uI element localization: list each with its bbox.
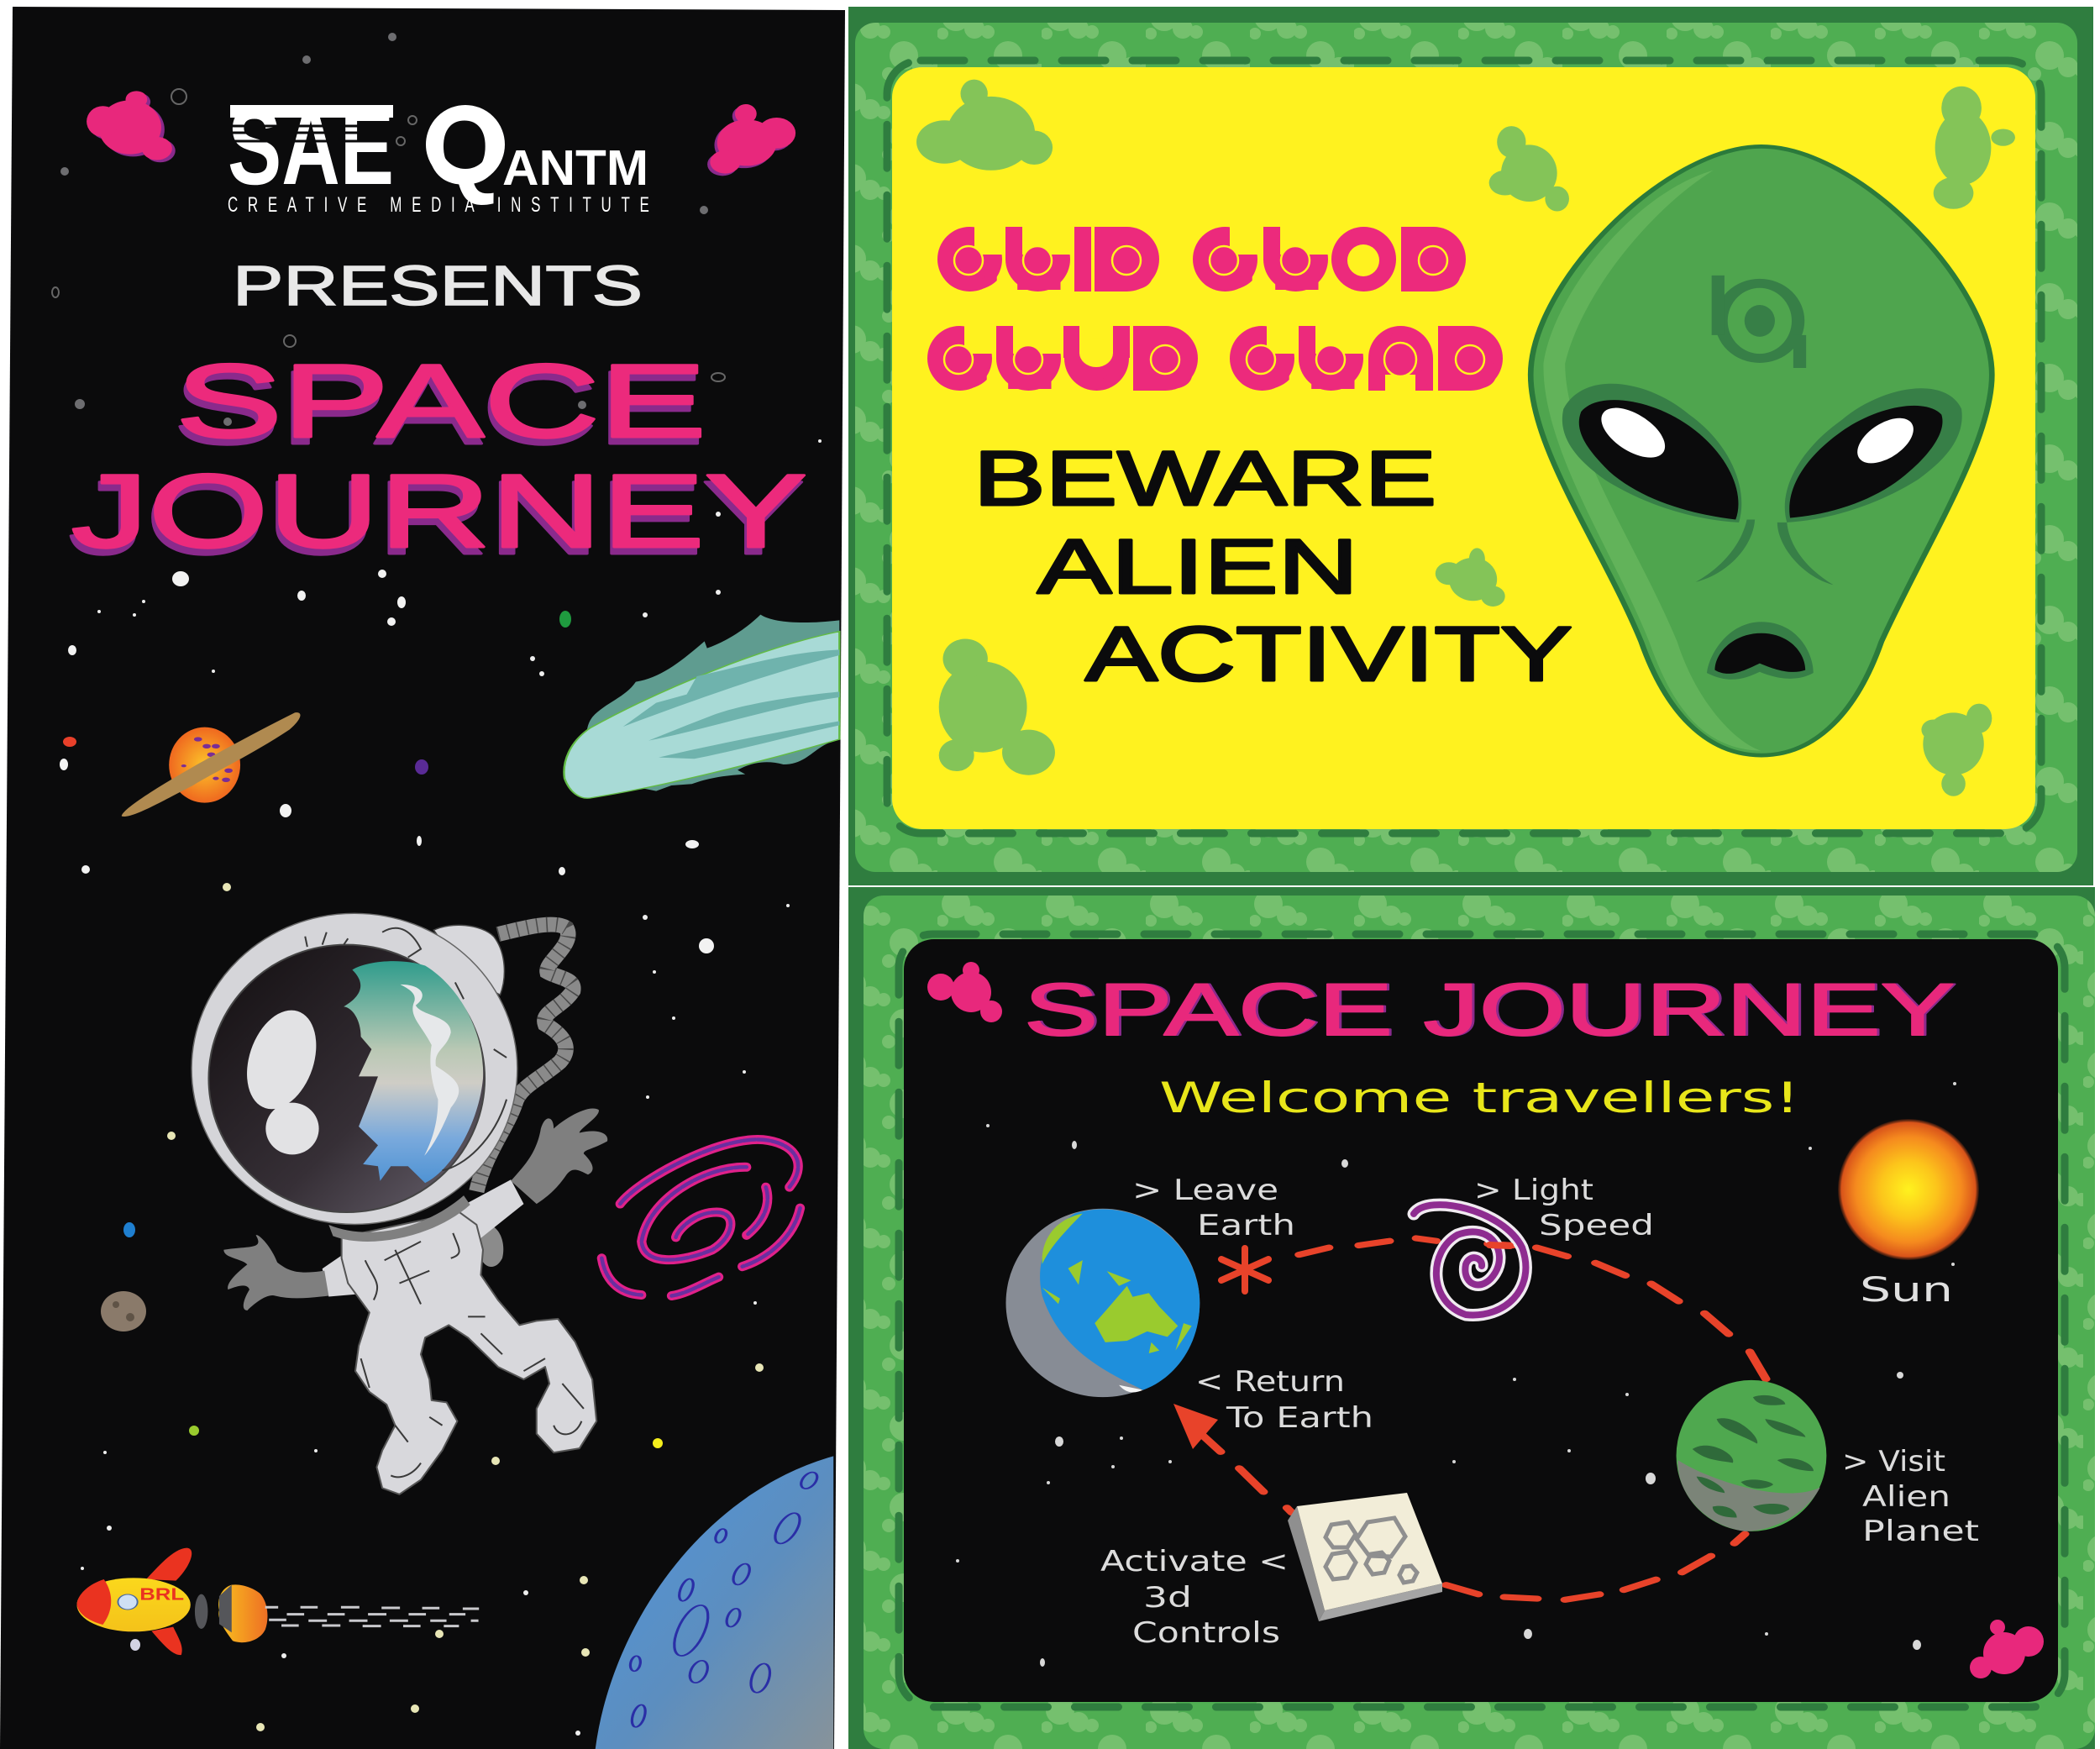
face highlight bbox=[1543, 171, 1761, 751]
alien script text bbox=[927, 214, 1503, 407]
logo: SAE Qantm: ANTM bbox=[502, 140, 648, 196]
3d controls tile bbox=[1288, 1493, 1442, 1621]
icon: pink blob right bbox=[707, 104, 795, 176]
title: space journey: JOURNEY bbox=[69, 460, 805, 576]
icon: pink blob title bbox=[927, 962, 1002, 1022]
reflection squiggle bbox=[401, 985, 459, 1156]
map labels: Planet bbox=[1862, 1515, 1979, 1548]
left glove bbox=[223, 1235, 328, 1310]
earth bbox=[1005, 1209, 1200, 1397]
alien head bbox=[1530, 146, 1992, 755]
astronaut bbox=[192, 913, 607, 1494]
mouth bbox=[1707, 622, 1814, 680]
map labels: 3d bbox=[1143, 1581, 1192, 1615]
map labels: Activate < bbox=[1100, 1545, 1289, 1578]
yellow field bbox=[892, 67, 2035, 829]
right eye bbox=[1785, 388, 1962, 523]
flame bbox=[218, 1584, 267, 1642]
suit body bbox=[342, 1212, 596, 1494]
left eye glint bbox=[1589, 400, 1677, 465]
logo: SAE Qantm: SAE bbox=[228, 85, 394, 207]
map labels: > Light bbox=[1474, 1174, 1593, 1207]
right eye glint bbox=[1846, 411, 1924, 470]
warning text: ACTIVITY bbox=[1085, 612, 1572, 697]
logo: SAE Qantm: CREATIVE MEDIA INSTITUTE bbox=[228, 193, 649, 217]
letter discs bbox=[927, 227, 1503, 391]
collar bbox=[328, 1195, 470, 1242]
map labels: Speed bbox=[1539, 1209, 1654, 1242]
forehead logo bbox=[1718, 276, 1800, 368]
map labels: To Earth bbox=[1226, 1401, 1373, 1435]
left eye bbox=[1562, 384, 1741, 523]
map labels: > Leave bbox=[1132, 1174, 1278, 1207]
title: space journey: SPACE bbox=[176, 344, 706, 460]
visor reflection bbox=[344, 961, 483, 1183]
helmet creases bbox=[305, 928, 507, 1170]
alien script words bbox=[927, 214, 1500, 407]
rocket label: BRL bbox=[139, 1584, 184, 1604]
warning text: ALIEN bbox=[1037, 524, 1358, 610]
comet bbox=[564, 615, 839, 798]
forehead logo dot bbox=[1745, 305, 1775, 337]
alien script words: GLIB GLOB bbox=[937, 214, 1464, 308]
warning text bbox=[974, 436, 1572, 697]
back pouch bbox=[480, 1224, 503, 1267]
panel: space journey flyer bbox=[0, 7, 845, 1749]
stitch dashes bbox=[899, 934, 2065, 1707]
suit creases bbox=[361, 1233, 584, 1477]
title: space journey: SPACE bbox=[173, 350, 704, 466]
logo: SAE Qantm bbox=[228, 85, 649, 217]
map title: SPACE JOURNEY bbox=[1026, 968, 1957, 1051]
icon: pink blob left bbox=[87, 91, 176, 162]
green blobs bbox=[916, 80, 2015, 796]
asterisk start marker bbox=[1221, 1248, 1268, 1291]
air hose bbox=[476, 925, 573, 1191]
title: space journey: JOURNEY bbox=[71, 454, 807, 570]
stitch dashes bbox=[887, 60, 2041, 833]
alien script words: GLUB GLAB bbox=[927, 313, 1500, 407]
text: presents: PRESENTS bbox=[233, 255, 643, 318]
card pattern bbox=[855, 23, 2077, 872]
flyer black background bbox=[0, 7, 845, 1749]
red dash over spiral bbox=[1489, 1245, 1510, 1246]
map labels: Alien bbox=[1862, 1480, 1950, 1514]
map labels: Earth bbox=[1197, 1209, 1295, 1242]
porthole bbox=[118, 1594, 138, 1610]
backpack bbox=[433, 925, 504, 995]
sun bbox=[1838, 1119, 1979, 1260]
black field bbox=[904, 939, 2058, 1702]
stars bbox=[52, 33, 822, 1736]
return arrow head bbox=[1173, 1404, 1218, 1449]
logo: SAE Qantm: Q bbox=[424, 87, 505, 207]
fins bbox=[146, 1548, 192, 1581]
alien planet bbox=[1677, 1380, 1826, 1531]
map labels: < Return bbox=[1195, 1365, 1345, 1399]
helmet bbox=[192, 913, 517, 1224]
asteroid bbox=[101, 1291, 146, 1331]
title: space journey bbox=[69, 344, 807, 576]
card border bbox=[848, 7, 2093, 885]
welcome heading: Welcome travellers! bbox=[1159, 1074, 1800, 1122]
sun label: Sun bbox=[1860, 1271, 1953, 1310]
card pattern bbox=[864, 896, 2095, 1749]
card border bbox=[848, 887, 2095, 1749]
left arm bbox=[323, 1254, 363, 1297]
right arm bbox=[449, 1179, 523, 1242]
galaxy bbox=[601, 1139, 801, 1296]
route dashes bbox=[1200, 1238, 1766, 1599]
cheek lines bbox=[1696, 520, 1755, 582]
map title bbox=[1024, 968, 1957, 1051]
map stars bbox=[956, 1082, 1956, 1667]
map title: SPACE JOURNEY bbox=[1024, 968, 1955, 1051]
rocket body bbox=[76, 1578, 191, 1631]
ringed planet bbox=[122, 712, 300, 817]
map labels bbox=[1100, 1174, 1979, 1650]
spiral light speed bbox=[1414, 1205, 1525, 1315]
eye highlights bbox=[235, 1001, 328, 1154]
map labels: Controls bbox=[1132, 1616, 1280, 1650]
icon: pink blob bottom right bbox=[1970, 1620, 2044, 1678]
rocket bbox=[76, 1548, 479, 1655]
head outline bbox=[1530, 146, 1992, 755]
exhaust ring bbox=[195, 1594, 207, 1629]
panel: journey map card bbox=[848, 887, 2095, 1749]
map labels: > Visit bbox=[1842, 1445, 1945, 1479]
warning text: BEWARE bbox=[974, 436, 1436, 522]
visor bbox=[208, 945, 485, 1212]
smoke trail bbox=[265, 1607, 479, 1626]
right glove bbox=[511, 1109, 607, 1204]
panel: beware alien activity card bbox=[848, 7, 2093, 885]
letter cuts and rings bbox=[944, 224, 1484, 393]
blue cratered planet bbox=[596, 1456, 833, 1749]
